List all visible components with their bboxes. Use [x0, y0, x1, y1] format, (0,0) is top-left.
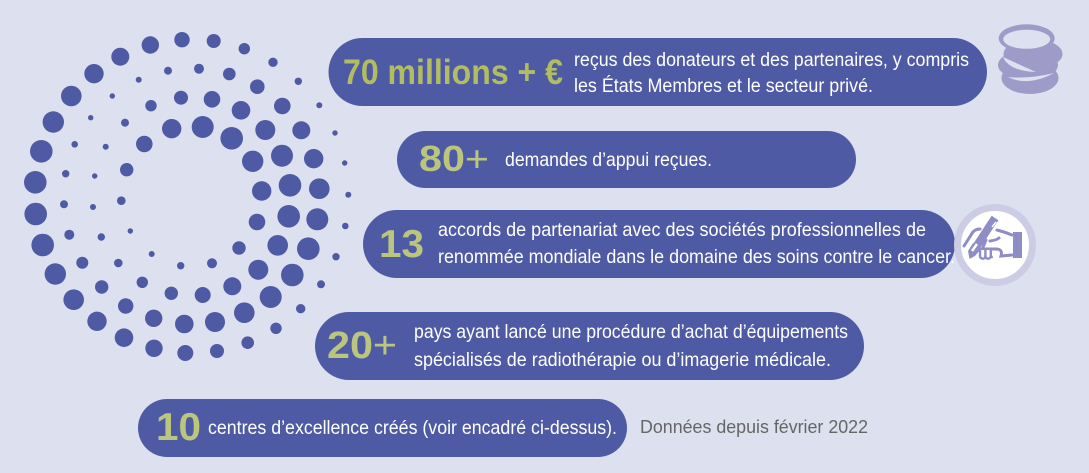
description: donors	[574, 49, 969, 97]
description: countries	[414, 321, 848, 371]
icon: hand signing	[958, 208, 1032, 282]
description: donors: les États Membres et le secteur privé.	[574, 74, 873, 97]
description: countries: pays ayant lancé une procédure d’achat d’équipements	[414, 321, 848, 343]
panel: 70 millions	[328, 38, 987, 106]
panel: 13	[363, 210, 955, 278]
figure: 13: 13	[379, 223, 424, 266]
figure: 70 millions + €: 70 millions + €	[343, 53, 563, 92]
description: donors: reçus des donateurs et des partenaires, y compris	[574, 49, 969, 71]
panel: 20+	[315, 312, 864, 380]
figure: 80+: 80+	[419, 138, 489, 179]
description: partnerships: renommée mondiale dans le domaine des soins contre le cancer.	[438, 246, 955, 268]
figure: 10: 10	[156, 406, 201, 449]
dot spiral graphic	[24, 32, 351, 361]
description: requests: demandes d’appui reçues.	[505, 149, 712, 171]
panel: 80+	[397, 131, 856, 188]
icon: coins	[998, 24, 1062, 94]
panel: 10	[138, 399, 627, 457]
data date note: Données depuis février 2022	[640, 417, 868, 437]
description: centres: centres d’excellence créés (voir encadré ci-dessus).	[208, 417, 617, 439]
description: partnerships: accords de partenariat avec des sociétés professionnelles de	[438, 219, 926, 241]
figure: 20+: 20+	[327, 325, 397, 367]
description: countries: spécialisés de radiothérapie ou d’imagerie médicale.	[414, 349, 831, 371]
description: partnerships	[438, 219, 955, 268]
